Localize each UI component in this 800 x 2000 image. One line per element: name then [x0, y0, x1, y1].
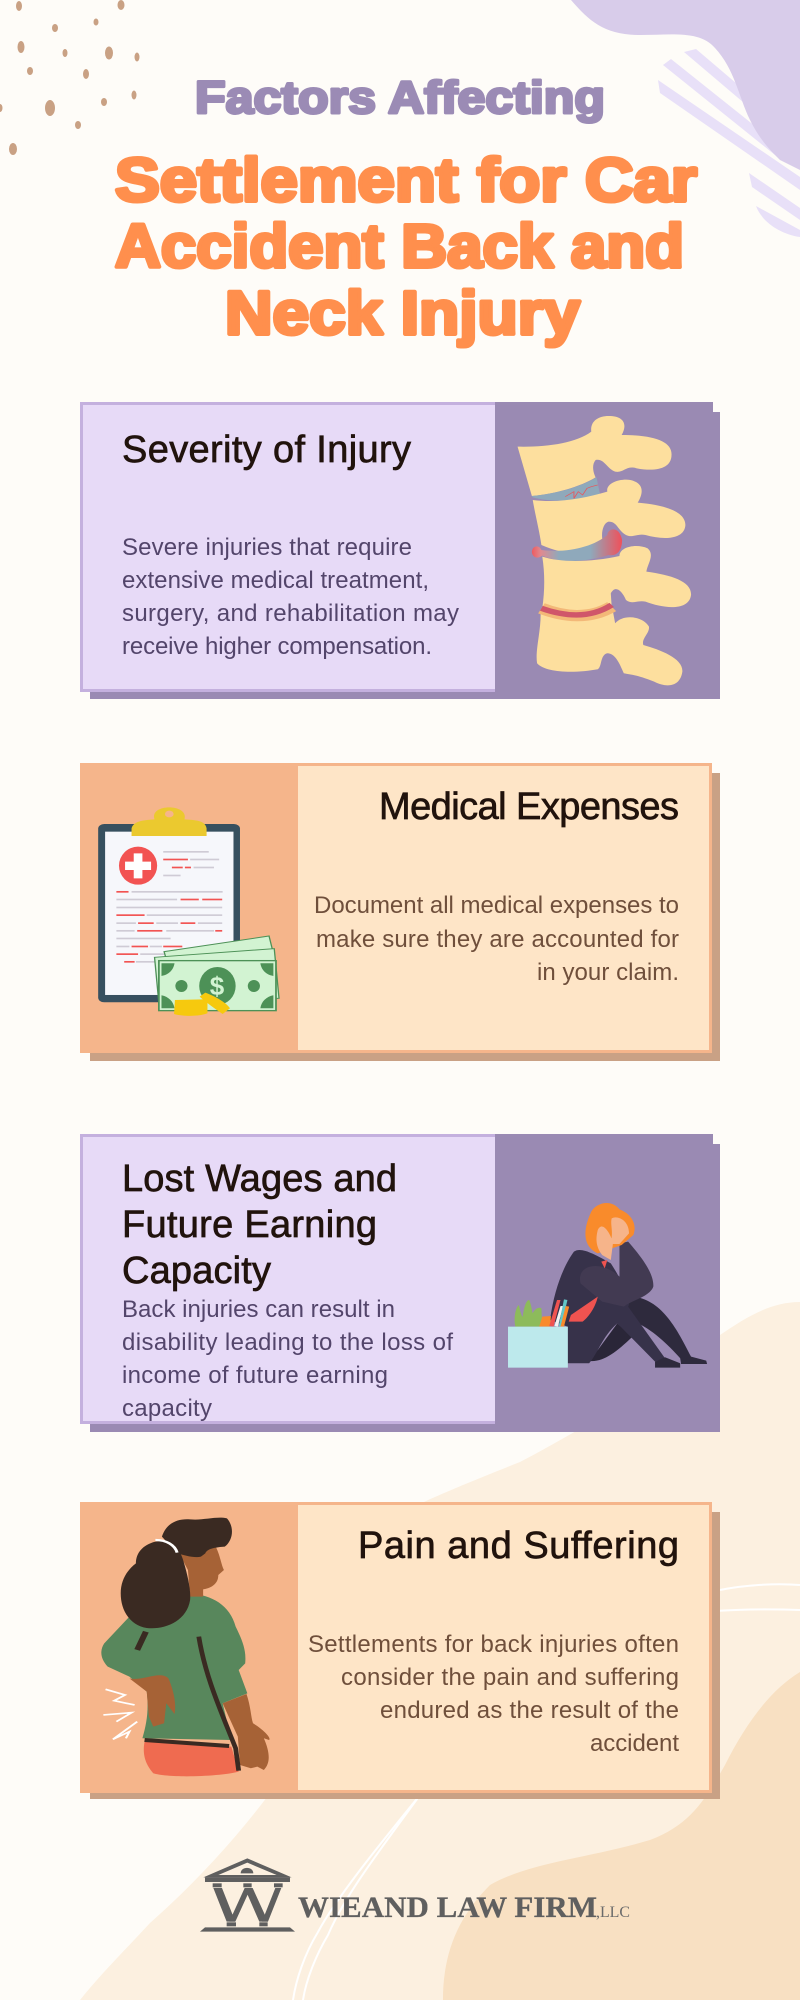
heading: Future Earning: [122, 1204, 377, 1246]
body text: Settlements for back injuries often: [308, 1631, 679, 1658]
scattered dots top left: [0, 0, 140, 155]
body text: Back injuries can result in: [122, 1296, 395, 1323]
body text: make sure they are accounted for: [316, 926, 679, 953]
icon: injured spine: [518, 416, 691, 685]
body text: in your claim.: [537, 959, 679, 986]
body text: income of future earning: [122, 1362, 388, 1389]
panel: lost wages and future earning capacity: [80, 1134, 720, 1432]
heading line 1: Settlement for Car: [115, 146, 697, 214]
background white curves: [293, 1584, 800, 2000]
icon: woman holding lower back: [101, 1518, 270, 1776]
logo: Wieand Law Firm: [200, 1858, 630, 1932]
heading: Medical Expenses: [379, 786, 679, 828]
heading: [122, 1158, 397, 1292]
body text: disability leading to the loss of: [122, 1329, 453, 1356]
background blob: darker peach: [443, 1672, 800, 2000]
icon: distressed worker with box: [508, 1203, 707, 1368]
title: [115, 72, 697, 347]
icon: courthouse W: [200, 1858, 295, 1932]
body text: consider the pain and suffering: [341, 1664, 679, 1691]
body text: [122, 534, 459, 660]
panel: severity of injury: [80, 402, 720, 699]
body text: [314, 892, 679, 986]
suffix LLC: ,LLC: [596, 1904, 630, 1921]
body text: endured as the result of the: [380, 1697, 679, 1724]
subtitle: Factors Affecting: Factors Affecting: [195, 72, 605, 123]
body text: Severe injuries that require: [122, 534, 412, 561]
decorative stripes top right: [658, 49, 800, 237]
body text: Document all medical expenses to: [314, 892, 679, 919]
panel: pain and suffering: [80, 1502, 720, 1799]
heading line 2: Accident Back and: [115, 212, 684, 280]
icon: clipboard and cash: [98, 807, 279, 1016]
heading: Lost Wages and: [122, 1158, 397, 1200]
body text: accident: [590, 1730, 679, 1757]
dollar sign: $: [210, 971, 225, 1001]
body text: surgery, and rehabilitation may: [122, 600, 459, 627]
heading: Severity of Injury: [122, 429, 411, 471]
body text: extensive medical treatment,: [122, 567, 429, 594]
background blob: pale peach: [80, 1302, 800, 2000]
heading line 3: Neck Injury: [225, 279, 580, 347]
body text: [308, 1631, 679, 1757]
body text: [122, 1296, 453, 1422]
panel: medical expenses: [80, 763, 720, 1061]
lilac blob top right: [571, 0, 800, 170]
wordmark: WIEAND LAW FIRM: [298, 1891, 597, 1924]
body text: receive higher compensation.: [122, 633, 432, 660]
body text: capacity: [122, 1395, 212, 1422]
heading: Pain and Suffering: [358, 1525, 679, 1567]
heading: Capacity: [122, 1250, 271, 1292]
